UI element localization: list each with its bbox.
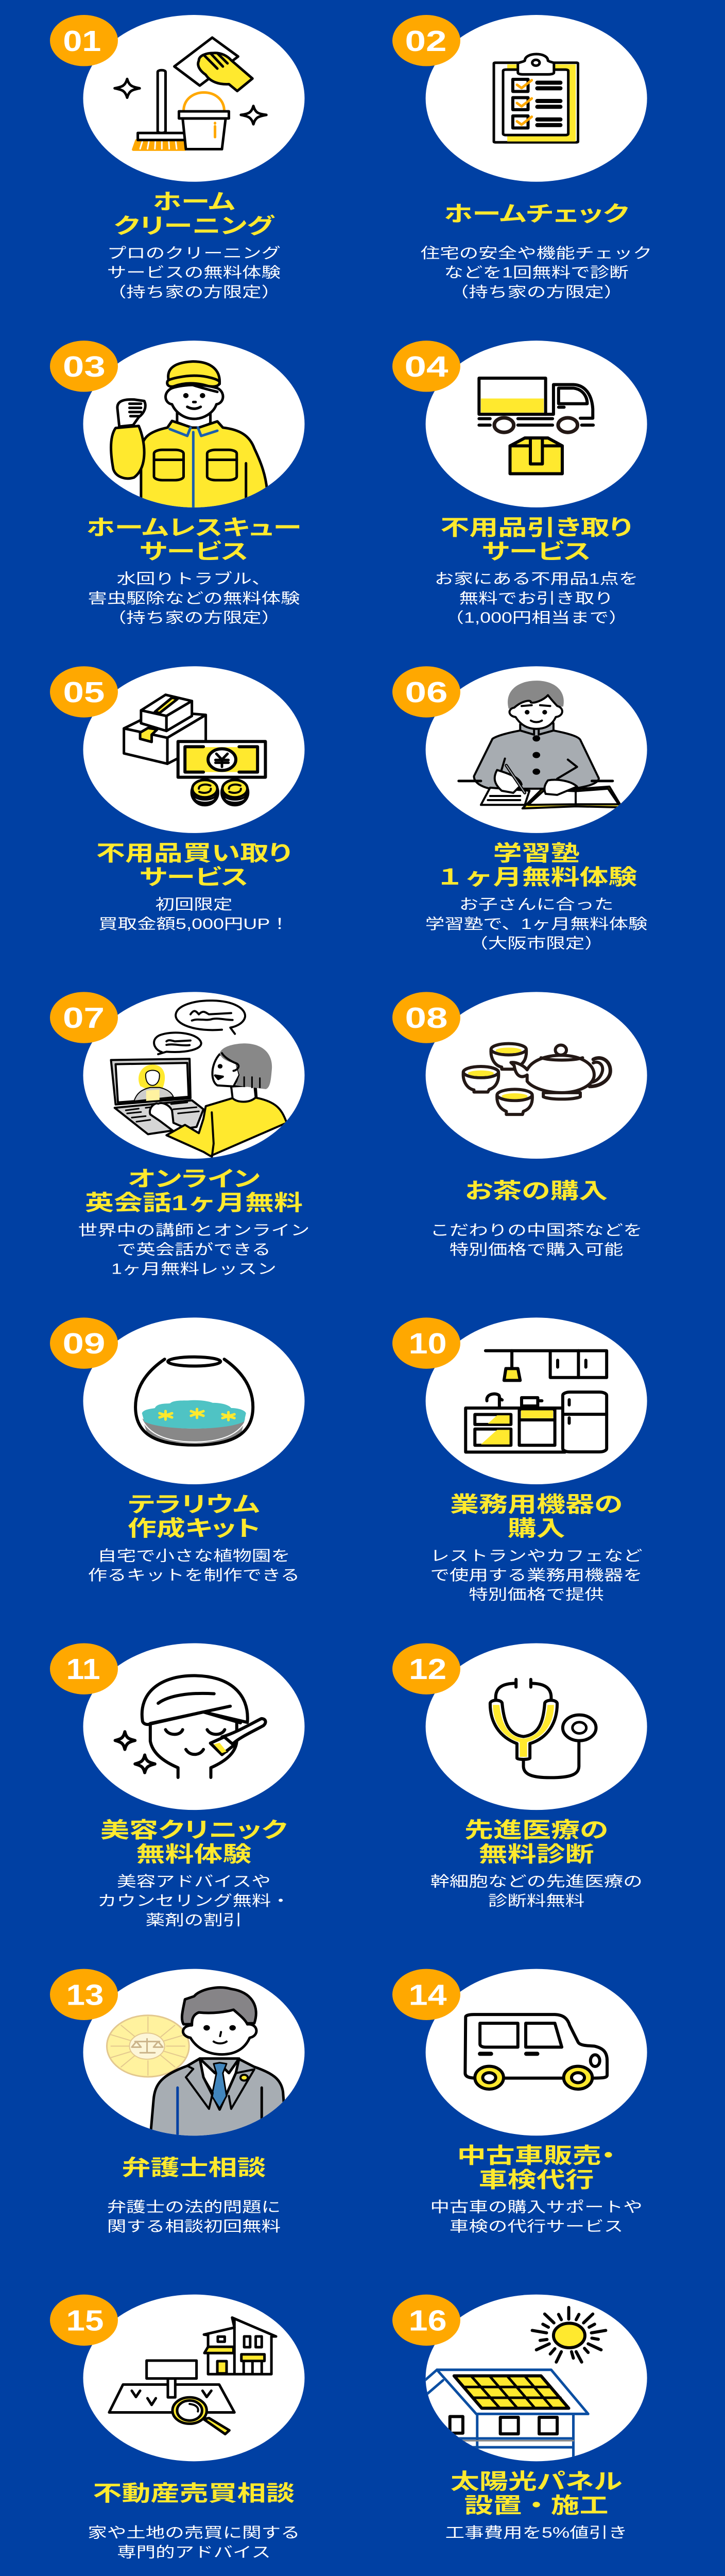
description: 美容アドバイスや <box>117 1874 271 1890</box>
description: （持ち家の方限定） <box>107 610 281 626</box>
badge: 04 <box>392 341 460 392</box>
badge: 15 <box>50 2295 118 2346</box>
badge: 12 <box>392 1643 460 1694</box>
panel: 11 beauty clinic <box>50 1643 305 1929</box>
description: 住宅の安全や機能チェック <box>421 245 652 262</box>
title: １ヶ月無料体験 <box>436 865 637 889</box>
badge: 07 <box>50 992 118 1043</box>
title: 中古車販売・ <box>457 2143 616 2168</box>
badge: 16: 16 <box>409 2304 447 2337</box>
description: で使用する業務用機器を <box>430 1567 643 1584</box>
badge: 04: 04 <box>405 351 448 383</box>
description: （大阪市限定） <box>469 936 604 952</box>
badge: 05 <box>50 666 118 718</box>
description <box>97 1874 290 1929</box>
icon: lawyer and lawyer's badge <box>107 1988 287 2142</box>
title <box>464 1818 608 1867</box>
title: オンライン <box>128 1166 260 1191</box>
title: 不用品引き取り <box>440 515 632 540</box>
description <box>435 571 638 626</box>
badge: 10 <box>392 1317 460 1369</box>
badge: 05: 05 <box>63 676 105 709</box>
description: 工事費用を5%値引き <box>445 2525 628 2541</box>
panel: 01 home cleaning <box>50 15 305 300</box>
description: こだわりの中国茶などを <box>430 1223 643 1239</box>
badge: 09: 09 <box>62 1328 105 1360</box>
badge: 03 <box>50 341 118 392</box>
description: 自宅で小さな植物園を <box>97 1548 290 1564</box>
badge: 13: 13 <box>66 1979 103 2011</box>
panel: 03 home rescue <box>50 341 305 626</box>
description: 中古車の購入サポートや <box>430 2199 643 2215</box>
description <box>430 1874 643 1909</box>
title: サービス <box>140 865 248 889</box>
title: 作成キット <box>128 1516 260 1541</box>
title <box>128 1492 260 1541</box>
badge: 06 <box>392 666 460 718</box>
icon: kitchen <box>465 1351 607 1452</box>
title: 購入 <box>508 1516 565 1541</box>
icon: van <box>465 2014 607 2089</box>
badge: 02 <box>392 15 460 66</box>
description: 弁護士の法的問題に <box>107 2199 281 2215</box>
badge: 14 <box>392 1969 460 2020</box>
title: 英会話1ヶ月無料 <box>85 1191 303 1215</box>
icon: clipboard checklist <box>494 54 578 142</box>
description: 害虫駆除などの無料体験 <box>88 590 300 607</box>
description: 関する相談初回無料 <box>107 2219 281 2235</box>
title: 美容クリニック <box>100 1818 287 1842</box>
panel: 16 solar panels <box>392 2295 647 2541</box>
title: 設置・施工 <box>464 2493 609 2518</box>
description <box>430 1223 643 1258</box>
description: プロのクリーニング <box>107 245 281 262</box>
title: 太陽光パネル <box>451 2469 622 2494</box>
title: 不動産売買相談 <box>93 2481 295 2505</box>
description: 車検の代行サービス <box>450 2219 623 2235</box>
description: 作るキットを制作できる <box>88 1567 300 1584</box>
title: ホームレスキュー <box>87 515 301 540</box>
title <box>451 2469 622 2518</box>
icon: boxes, bill and coins <box>124 695 265 805</box>
badge: 11: 11 <box>66 1653 100 1686</box>
title: 弁護士相談 <box>122 2156 266 2180</box>
title <box>436 841 637 889</box>
title <box>440 515 632 564</box>
badge: 08: 08 <box>405 1002 447 1035</box>
icon: broom, bucket and gloved hand <box>115 38 266 149</box>
badge: 12: 12 <box>409 1653 446 1686</box>
title: テラリウム <box>128 1492 260 1517</box>
badge: 02: 02 <box>405 25 446 58</box>
icon: truck and box <box>479 378 593 473</box>
description: （持ち家の方限定） <box>450 284 623 300</box>
title: 学習塾 <box>493 841 580 866</box>
description <box>425 897 647 952</box>
description: お子さんに合った <box>459 897 614 913</box>
badge: 11 <box>50 1643 118 1694</box>
title: 不用品買い取り <box>96 841 291 866</box>
badge: 01 <box>50 15 118 66</box>
badge: 15: 15 <box>66 2304 103 2337</box>
icon: face with towel and brush <box>115 1675 266 1777</box>
panel: 09 terrarium <box>50 1317 305 1584</box>
description: お家にある不用品1点を <box>435 571 638 587</box>
icon: stethoscope <box>490 1680 596 1777</box>
description: サービスの無料体験 <box>107 265 281 281</box>
title: 業務用機器の <box>450 1492 623 1517</box>
description: 診断料無料 <box>488 1893 584 1909</box>
title: ホームチェック <box>444 201 629 226</box>
description: 薬剤の割引 <box>146 1912 242 1929</box>
description <box>88 571 300 626</box>
title: 無料診断 <box>479 1842 594 1867</box>
icon: teapot and cups <box>463 1044 610 1114</box>
description: 初回限定 <box>156 897 232 913</box>
badge: 03: 03 <box>63 351 106 383</box>
title: 先進医療の <box>464 1818 608 1842</box>
description <box>98 897 289 933</box>
description: 家や土地の売買に関する <box>88 2525 300 2541</box>
description: 水回りトラブル、 <box>117 571 271 587</box>
title: 無料体験 <box>136 1842 251 1867</box>
description <box>88 1548 300 1584</box>
description <box>107 245 281 300</box>
description <box>78 1223 309 1277</box>
title: 車検代行 <box>479 2167 594 2192</box>
title <box>450 1492 623 1541</box>
description <box>430 1548 643 1603</box>
description: などを1回無料で診断 <box>444 265 629 281</box>
icon: sun and house with solar panels <box>416 2308 606 2465</box>
description: レストランやカフェなど <box>430 1548 643 1564</box>
title: サービス <box>482 539 591 564</box>
description: 特別価格で購入可能 <box>450 1242 623 1258</box>
badge: 08 <box>392 992 460 1043</box>
description: で英会話ができる <box>117 1242 271 1258</box>
panel: 04 unwanted item pickup <box>392 341 647 626</box>
title <box>457 2143 616 2192</box>
panel: 14 used cars <box>392 1969 647 2235</box>
description: カウンセリング無料・ <box>97 1893 290 1909</box>
description: 買取金額5,000円UP！ <box>98 916 289 933</box>
description: 専門的アドバイス <box>117 2545 271 2561</box>
description: 幹細胞などの先進医療の <box>430 1874 643 1890</box>
panel: 13 lawyer consultation <box>50 1969 305 2235</box>
description: 1ヶ月無料レッスン <box>111 1261 277 1277</box>
badge: 14: 14 <box>409 1979 447 2011</box>
description: 特別価格で提供 <box>469 1587 604 1603</box>
title <box>85 1166 303 1215</box>
badge: 06: 06 <box>405 676 447 709</box>
icon: student writing at desk <box>459 681 622 808</box>
title <box>100 1818 287 1867</box>
title: サービス <box>140 539 248 564</box>
description: （持ち家の方限定） <box>107 284 281 300</box>
badge: 16 <box>392 2295 460 2346</box>
panel: 02 home check <box>392 15 652 300</box>
description <box>421 245 652 300</box>
icon: land plot, sign, house and magnifier <box>109 2317 276 2434</box>
title: ホーム <box>153 190 235 214</box>
title <box>114 190 275 238</box>
description <box>88 2525 300 2561</box>
title <box>96 841 291 889</box>
title <box>87 515 301 564</box>
panel: 12 advanced medical diagnosis <box>392 1643 647 1909</box>
badge: 07: 07 <box>63 1002 105 1035</box>
title: クリーニング <box>114 214 275 238</box>
description: 世界中の講師とオンライン <box>78 1223 309 1239</box>
badge: 10: 10 <box>409 1328 447 1360</box>
panel: 08 tea <box>392 992 647 1258</box>
panel: 15 real estate consultation <box>50 2295 305 2561</box>
title: お茶の購入 <box>465 1179 608 1203</box>
icon: woman on video call with laptop <box>111 1001 287 1158</box>
description <box>430 2199 643 2235</box>
panel: 06 cram school <box>392 666 647 952</box>
badge: 13 <box>50 1969 118 2020</box>
badge: 09 <box>50 1317 118 1369</box>
icon: worker in yellow uniform <box>111 362 267 513</box>
description: （1,000円相当まで） <box>445 610 628 626</box>
panel: 05 unwanted item purchase <box>50 666 305 933</box>
description <box>107 2199 281 2235</box>
description: 無料でお引き取り <box>459 590 614 607</box>
icon: terrarium jar <box>135 1357 253 1445</box>
panel: 10 commercial kitchen equipment <box>392 1317 647 1603</box>
panel: 07 online English <box>50 992 309 1277</box>
badge: 01: 01 <box>63 25 101 58</box>
description: 学習塾で、1ヶ月無料体験 <box>425 916 647 933</box>
